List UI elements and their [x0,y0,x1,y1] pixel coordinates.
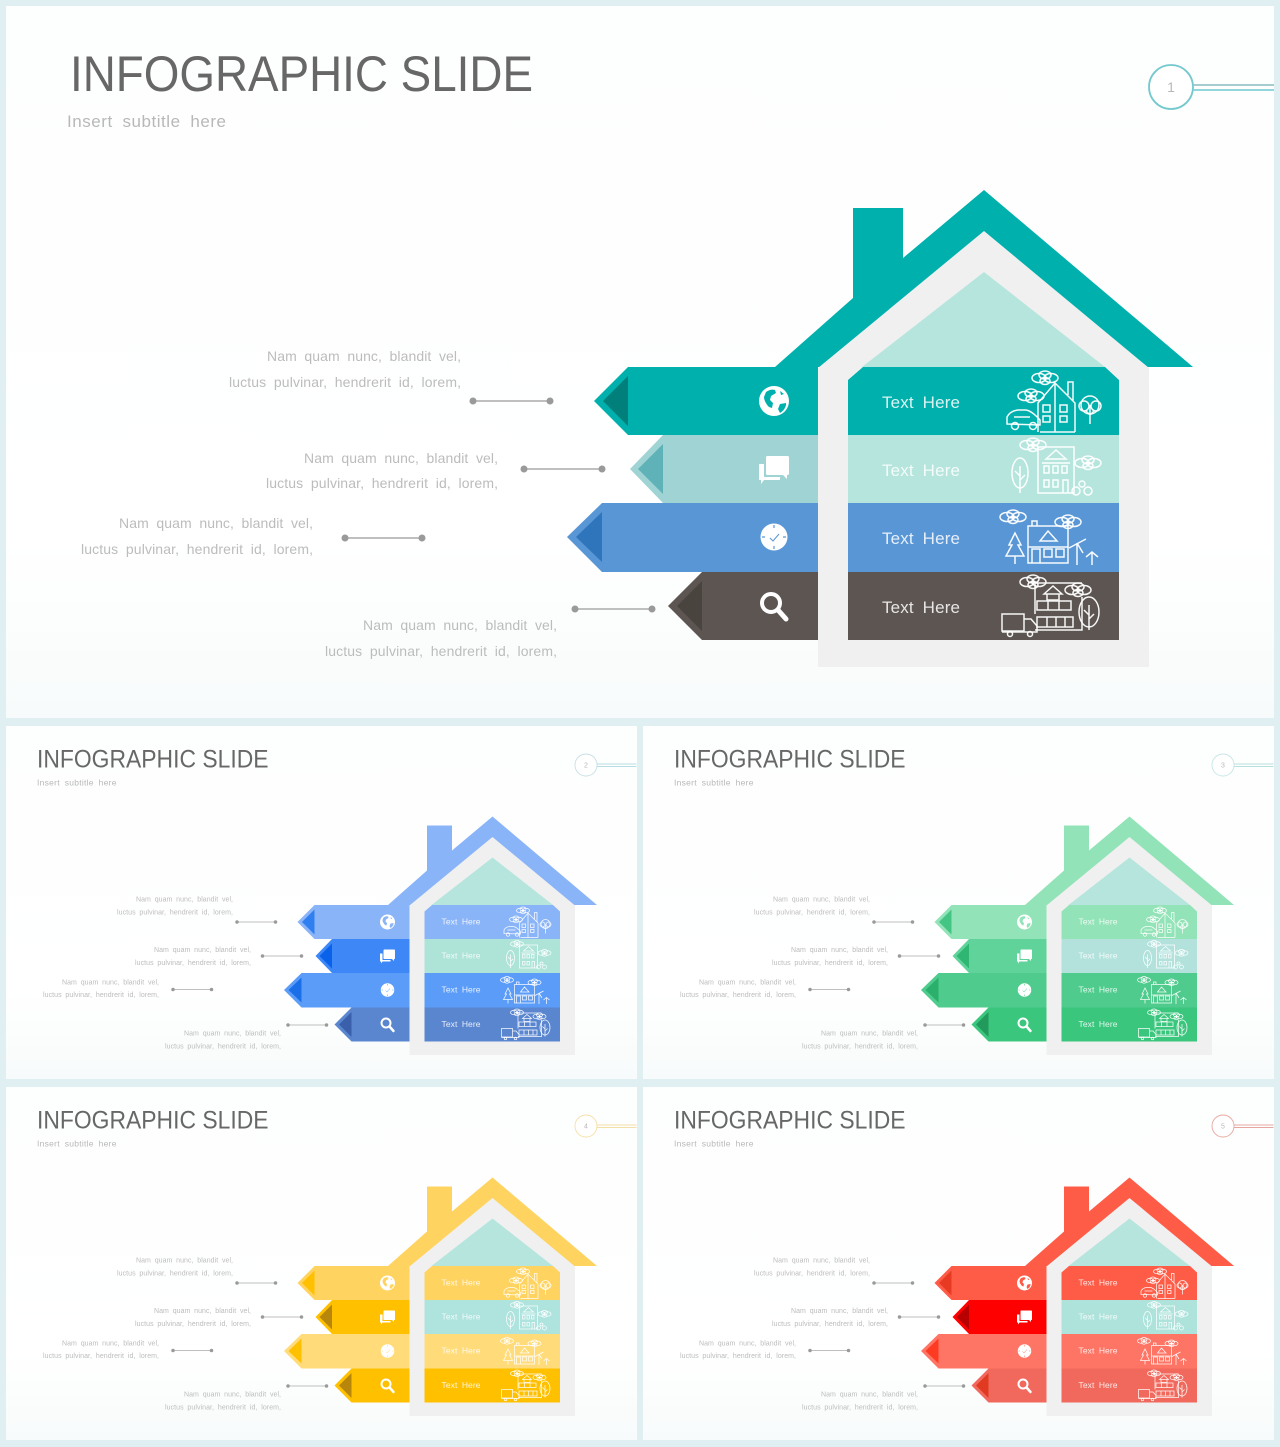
roof and chimney [388,1178,597,1266]
line art: row 1 [504,1268,551,1298]
connector 2 [261,1315,303,1319]
text block 4 [802,1392,918,1412]
arrow 1 [298,905,410,939]
text block 4: Nam quam nunc, blandit vel, [821,1030,918,1038]
connector 1 [872,920,914,924]
connector 2 [520,466,606,472]
text block 4: luctus pulvinar, hendrerit id, lorem, [165,1044,281,1050]
row 4 [1062,1368,1197,1402]
text block 1: luctus pulvinar, hendrerit id, lorem, [754,910,870,916]
connector 4 [286,1384,328,1388]
arrow 2 [316,939,410,973]
row labels: Text Here [1078,1312,1118,1322]
text block 3: luctus pulvinar, hendrerit id, lorem, [43,992,159,999]
row 2 [1062,1300,1197,1334]
row 3 [424,973,560,1008]
attic [432,858,553,905]
subtitle: Insert subtitle here [67,112,226,131]
icon: globe [759,386,789,416]
arrow 3 [284,973,410,1008]
title: INFOGRAPHIC SLIDE [37,1106,268,1134]
arrow 1 [934,905,1046,939]
row labels [882,393,960,617]
line art: row 2 [506,1302,551,1330]
connector 3 [342,534,426,542]
slide number badge: 2 [584,762,588,770]
row labels: Text Here [882,598,960,617]
icon: globe [380,1276,395,1290]
roof and chimney [775,190,1193,367]
row 1 [1062,905,1197,939]
text block 4 [802,1030,918,1050]
icon: chat [1017,1310,1032,1324]
house wall frame [410,1198,575,1416]
arrow 4 [668,572,818,640]
arrow 2 [630,435,818,503]
connector 2 [261,954,303,958]
icon: clock [1018,983,1031,997]
roof and chimney [1025,816,1234,905]
line art: row 4 [502,1009,550,1040]
icon: globe [1017,1276,1032,1290]
row 3 [424,1334,560,1368]
text block 2 [772,1308,888,1328]
row labels: Text Here [442,1019,481,1029]
slide number badge [1149,65,1274,109]
arrow 1 [594,367,818,435]
text block 3 [81,515,313,557]
text block 3: Nam quam nunc, blandit vel, [62,1340,159,1348]
text block 2: luctus pulvinar, hendrerit id, lorem, [135,1321,251,1328]
line art: row 1 [1007,371,1101,432]
row labels: Text Here [442,1346,481,1356]
attic [1068,1218,1190,1266]
row 3 [848,503,1119,572]
roof and chimney [388,816,597,905]
icon: search [382,1018,394,1031]
text block 4 [165,1030,281,1050]
slide number badge: 5 [1221,1124,1225,1130]
text block 1: luctus pulvinar, hendrerit id, lorem, [754,1270,870,1278]
text block 4: luctus pulvinar, hendrerit id, lorem, [802,1044,918,1050]
text block 2: Nam quam nunc, blandit vel, [791,1308,888,1315]
line art: row 4 [1138,1370,1187,1401]
text block 2: Nam quam nunc, blandit vel, [304,450,498,466]
subtitle: Insert subtitle here [37,778,117,788]
row 4 [1062,1008,1197,1042]
house wall frame [410,837,575,1055]
row labels: Text Here [1078,984,1118,994]
row 2 [424,1300,560,1334]
text block 1: Nam quam nunc, blandit vel, [136,1258,233,1264]
text block 1: Nam quam nunc, blandit vel, [267,348,461,364]
icon: chat [380,1310,395,1324]
row 4 [424,1008,560,1042]
icon: globe [380,914,395,930]
row labels: Text Here [1078,916,1118,926]
row labels: Text Here [1078,1346,1118,1356]
line art: row 4 [1138,1009,1187,1040]
row labels: Text Here [442,1312,481,1322]
text block 1: luctus pulvinar, hendrerit id, lorem, [117,910,233,916]
slide number badge [575,754,636,776]
text block 2 [135,947,251,967]
line art: row 2 [1144,1302,1188,1330]
line art: row 1 [1141,1268,1188,1298]
line art: row 1 [1141,907,1188,938]
text block 2: luctus pulvinar, hendrerit id, lorem, [772,1321,888,1328]
text block 1 [117,1258,233,1278]
title: INFOGRAPHIC SLIDE [37,746,268,774]
text block 3 [43,1340,159,1360]
row 2 [1062,939,1197,973]
house wall frame [1046,1198,1212,1416]
text block 1 [754,1258,870,1278]
icon: clock [381,983,394,997]
text block 3: luctus pulvinar, hendrerit id, lorem, [43,1353,159,1360]
icon: search [762,594,786,619]
icon: search [1018,1018,1030,1031]
text block 1: Nam quam nunc, blandit vel, [773,1258,870,1264]
row 4 [848,572,1119,640]
text block 1: Nam quam nunc, blandit vel, [136,896,233,904]
title: INFOGRAPHIC SLIDE [70,46,533,102]
row labels: Text Here [882,393,960,412]
row labels: Text Here [1078,950,1118,960]
text block 1: Nam quam nunc, blandit vel, [773,896,870,904]
line art: row 3 [1138,1338,1186,1365]
text block 4: luctus pulvinar, hendrerit id, lorem, [802,1404,918,1412]
line art: row 4 [1002,575,1099,636]
arrow 3 [567,503,818,572]
text block 4: luctus pulvinar, hendrerit id, lorem, [325,643,557,659]
connector 2 [898,954,940,958]
icon: clock [381,1344,394,1358]
slide number badge: 1 [1167,79,1175,95]
row labels: Text Here [1078,1380,1118,1390]
connector 1 [235,920,277,924]
row 3 [1062,973,1197,1008]
house wall frame [818,231,1149,667]
row labels: Text Here [882,461,960,480]
row labels: Text Here [1078,1019,1118,1029]
icon: search [382,1380,394,1392]
connector 3 [171,1349,213,1352]
text block 2: Nam quam nunc, blandit vel, [791,947,888,954]
slide 3 content [674,746,1274,1055]
text block 3: Nam quam nunc, blandit vel, [62,980,159,986]
attic [1068,858,1190,905]
row 3 [1062,1334,1197,1368]
line art: row 3 [1000,510,1098,565]
subtitle: Insert subtitle here [674,778,754,788]
row 2 [424,939,560,973]
connector 1 [235,1281,277,1285]
slide number badge [1212,754,1274,776]
slide 2: blue [6,726,637,1079]
text block 3: Nam quam nunc, blandit vel, [699,980,796,986]
row labels: Text Here [1078,1278,1118,1288]
connector 1 [872,1281,914,1285]
row labels [442,916,481,1029]
line art: row 2 [1144,940,1188,969]
title: INFOGRAPHIC SLIDE [674,746,906,774]
text block 2: luctus pulvinar, hendrerit id, lorem, [135,960,251,967]
attic [432,1218,553,1266]
subtitle: Insert subtitle here [674,1138,754,1148]
slide number badge [575,1115,636,1137]
row 4 [424,1368,560,1402]
row labels [1078,916,1118,1029]
text block 4: luctus pulvinar, hendrerit id, lorem, [165,1404,281,1412]
text block 2 [135,1308,251,1328]
arrow 1 [298,1266,410,1300]
connector 3 [171,988,213,991]
text block 4: Nam quam nunc, blandit vel, [821,1392,918,1398]
text block 3: Nam quam nunc, blandit vel, [699,1340,796,1348]
line art: row 3 [1138,976,1186,1004]
row 1 [848,367,1119,435]
line art: row 1 [504,907,551,938]
text block 2: luctus pulvinar, hendrerit id, lorem, [266,475,498,491]
row labels: Text Here [442,950,481,960]
connector 3 [808,1349,850,1352]
connector 4 [286,1023,328,1027]
text block 4 [325,617,557,659]
row 2 [848,435,1119,503]
arrow 4 [972,1368,1046,1402]
text block 4: Nam quam nunc, blandit vel, [184,1030,281,1038]
arrow 2 [952,1300,1046,1334]
icon: search [1018,1380,1030,1392]
arrow 1 [934,1266,1046,1300]
house wall frame [1046,837,1212,1055]
connector 4 [572,606,656,612]
arrow 4 [334,1368,410,1402]
text block 1 [754,896,870,916]
text block 2 [266,450,498,491]
icon: clock [1018,1344,1031,1358]
connector 4 [923,1023,965,1027]
connector 1 [470,398,554,404]
line art: row 2 [1012,438,1101,495]
arrow 4 [972,1008,1046,1042]
text block 1: luctus pulvinar, hendrerit id, lorem, [229,374,461,390]
row labels: Text Here [442,916,481,926]
text block 3: luctus pulvinar, hendrerit id, lorem, [81,541,313,557]
slide 2 content [37,746,636,1055]
icon: chat [759,456,789,484]
icon: clock [760,524,788,550]
icon: chat [1017,950,1032,964]
text block 1: luctus pulvinar, hendrerit id, lorem, [117,1270,233,1278]
text block 2: Nam quam nunc, blandit vel, [154,1308,251,1315]
row 1 [424,905,560,939]
text block 1 [229,348,461,390]
connector 4 [923,1384,965,1388]
text block 2: Nam quam nunc, blandit vel, [154,947,251,954]
arrow 3 [921,1334,1046,1368]
text block 3: Nam quam nunc, blandit vel, [119,515,313,531]
slide number badge: 4 [584,1124,588,1130]
text block 3: luctus pulvinar, hendrerit id, lorem, [680,992,796,999]
arrow 2 [316,1300,410,1334]
slide 4: yellow [6,1087,637,1440]
line art: row 4 [502,1370,550,1401]
connector 2 [898,1315,940,1319]
attic [862,272,1105,367]
slide number badge: 3 [1221,762,1225,770]
text block 1 [117,896,233,916]
arrow 2 [952,939,1046,973]
line art: row 2 [506,940,551,969]
row labels: Text Here [882,529,960,548]
text block 2: luctus pulvinar, hendrerit id, lorem, [772,960,888,967]
text block 3 [680,980,796,999]
line art: row 3 [500,976,550,1004]
arrow 4 [334,1008,410,1042]
text block 2 [772,947,888,967]
row labels: Text Here [442,1278,481,1288]
roof and chimney [1025,1178,1234,1266]
slide 5: red [643,1087,1274,1440]
title: INFOGRAPHIC SLIDE [674,1106,906,1134]
text block 3: luctus pulvinar, hendrerit id, lorem, [680,1353,796,1360]
row 1 [1062,1266,1197,1300]
subtitle: Insert subtitle here [37,1138,117,1148]
row 1 [424,1266,560,1300]
icon: globe [1017,914,1032,930]
connector 3 [808,988,850,991]
text block 3 [680,1340,796,1360]
row labels [442,1278,481,1390]
text block 4: Nam quam nunc, blandit vel, [184,1392,281,1398]
text block 3 [43,980,159,999]
icon: chat [380,950,395,964]
line art: row 3 [500,1338,550,1365]
slide 3: green [643,726,1274,1079]
text block 4 [165,1392,281,1412]
slide 4 content [37,1106,636,1416]
text block 4: Nam quam nunc, blandit vel, [363,617,557,633]
row labels [1078,1278,1118,1390]
arrow 3 [284,1334,410,1368]
slide 1: teal large slide [6,6,1274,718]
slide number badge [1212,1115,1274,1137]
row labels: Text Here [442,984,481,994]
row labels: Text Here [442,1380,481,1390]
slide 5 content [674,1106,1274,1416]
arrow 3 [921,973,1046,1008]
